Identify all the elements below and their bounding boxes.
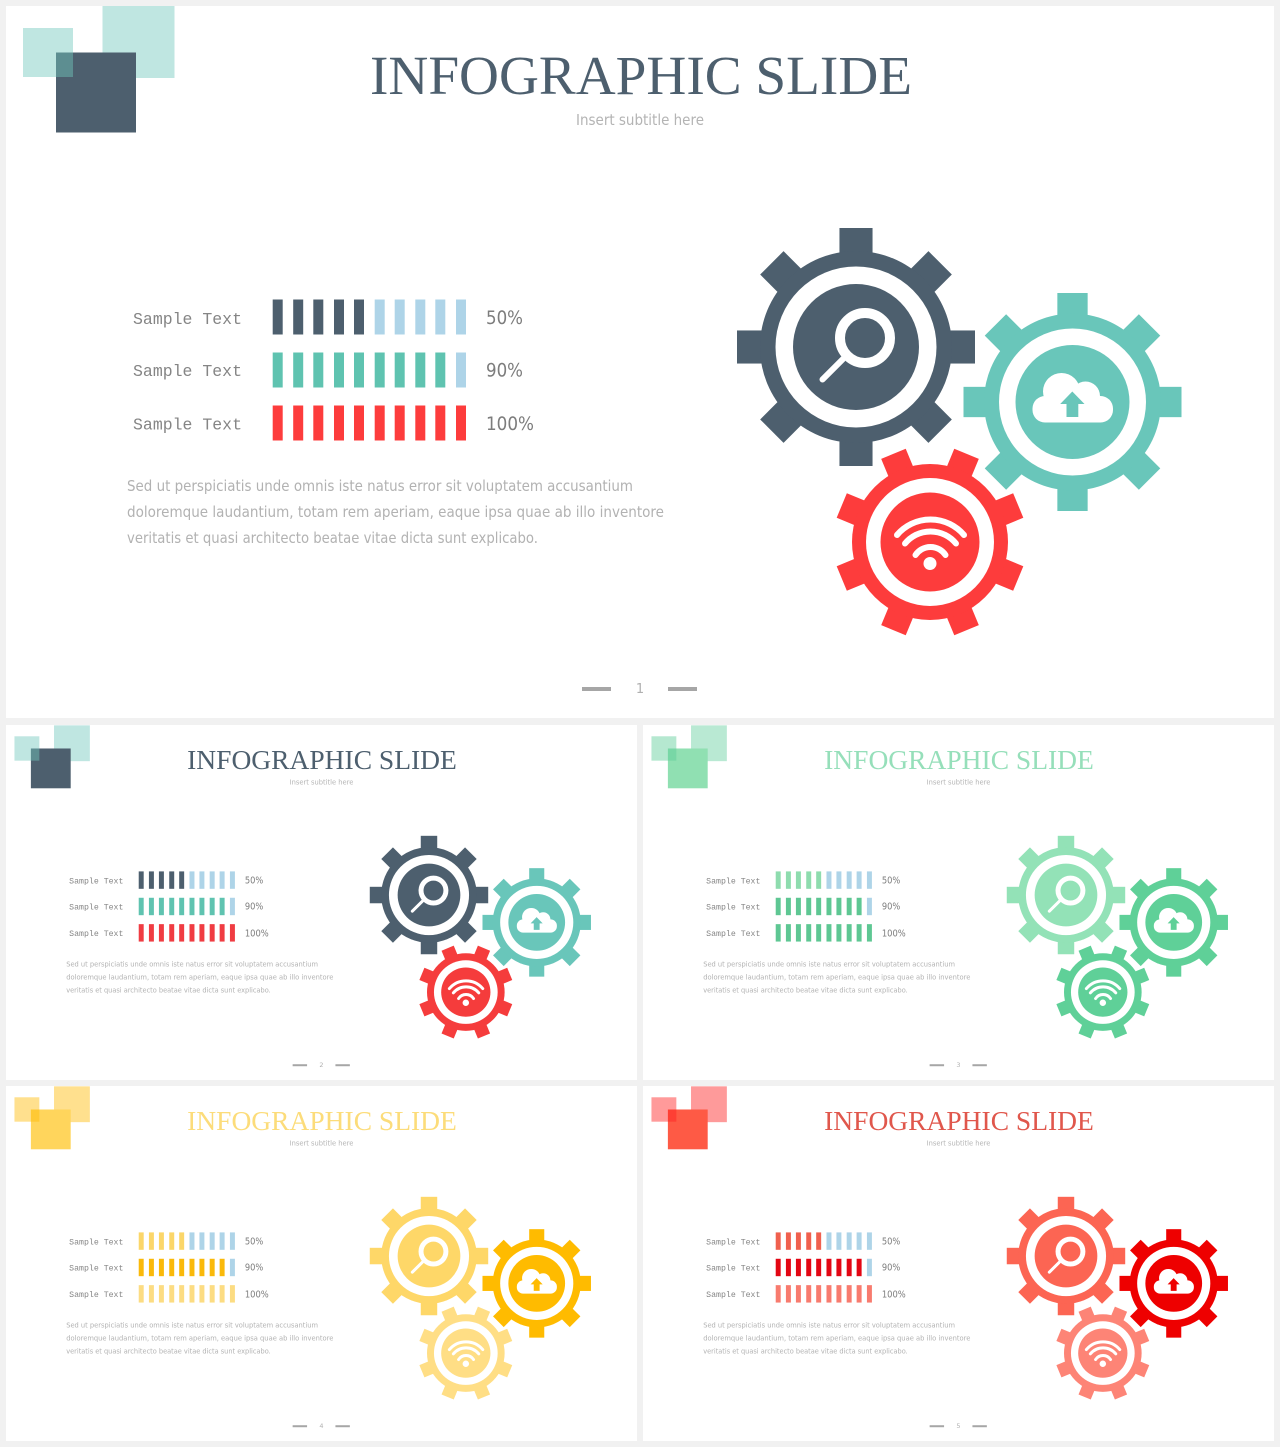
slide 3: green version bbox=[643, 725, 1274, 1080]
title: INFOGRAPHIC SLIDE bbox=[370, 45, 912, 106]
page number bbox=[293, 1061, 350, 1069]
bar row: 100%: Sample Text bbox=[706, 1290, 761, 1300]
body text: doloremque laudantium, totam rem aperiam, eaque ipsa quae ab illo inventore bbox=[127, 503, 664, 521]
icon: wifi gear bbox=[404, 1291, 528, 1415]
body text bbox=[703, 960, 971, 995]
bar row: 50%: 50% bbox=[882, 876, 900, 887]
subtitle: Insert subtitle here bbox=[576, 111, 704, 129]
bar row: 100% bbox=[133, 406, 534, 440]
bar row: 90%: 90% bbox=[486, 360, 523, 382]
bar row: 50% bbox=[69, 871, 263, 889]
page number bbox=[930, 1422, 987, 1430]
bar row: 100%: Sample Text bbox=[706, 929, 761, 939]
bar row: 90% bbox=[706, 1259, 900, 1276]
icon: cloud upload gear bbox=[964, 293, 1182, 511]
bar row: 50%: Sample Text bbox=[69, 877, 124, 887]
body text: Sed ut perspiciatis unde omnis iste natus error sit voluptatem accusantium bbox=[127, 477, 633, 495]
icon: wifi gear bbox=[404, 930, 528, 1054]
title: INFOGRAPHIC SLIDE bbox=[187, 1106, 457, 1136]
subtitle: Insert subtitle here bbox=[290, 1139, 354, 1148]
bar row: 90% bbox=[706, 898, 900, 915]
bar row: 100% bbox=[706, 1285, 906, 1303]
bar row: 50%: Sample Text bbox=[706, 877, 761, 887]
bar row: 90%: Sample Text bbox=[69, 902, 124, 912]
bar row: 50%: Sample Text bbox=[69, 1238, 124, 1248]
body text: veritatis et quasi architecto beatae vitae dicta sunt explicabo. bbox=[703, 1347, 908, 1356]
slide 1: main slate, teal and red version bbox=[6, 6, 1274, 718]
bar row: 50%: 50% bbox=[486, 307, 523, 329]
slide 2: slate, teal and red small version bbox=[6, 725, 637, 1080]
body text: veritatis et quasi architecto beatae vitae dicta sunt explicabo. bbox=[127, 529, 538, 547]
bar row: 100% bbox=[706, 924, 906, 942]
icon: wifi gear bbox=[805, 417, 1055, 667]
page number: 4 bbox=[319, 1422, 324, 1430]
bar row: 90%: 90% bbox=[245, 1263, 263, 1274]
body text: veritatis et quasi architecto beatae vitae dicta sunt explicabo. bbox=[66, 986, 271, 995]
page number bbox=[293, 1422, 350, 1430]
body text: Sed ut perspiciatis unde omnis iste natus error sit voluptatem accusantium bbox=[703, 960, 955, 969]
body text: Sed ut perspiciatis unde omnis iste natus error sit voluptatem accusantium bbox=[66, 1321, 318, 1330]
bar row: 90%: 90% bbox=[882, 902, 900, 913]
bar row: 100%: 100% bbox=[882, 928, 906, 939]
body text: veritatis et quasi architecto beatae vitae dicta sunt explicabo. bbox=[66, 1347, 271, 1356]
corner squares bbox=[14, 725, 90, 788]
body text bbox=[66, 1321, 334, 1356]
bar row: 90%: Sample Text bbox=[69, 1263, 124, 1273]
bar row: 90%: 90% bbox=[245, 902, 263, 913]
bar row: 100%: 100% bbox=[245, 1289, 269, 1300]
body text bbox=[703, 1321, 971, 1356]
icon: search gear bbox=[1007, 836, 1125, 954]
title: INFOGRAPHIC SLIDE bbox=[824, 1106, 1094, 1136]
bar row: 50%: 50% bbox=[245, 1237, 263, 1248]
bar row: 50% bbox=[706, 871, 900, 889]
page number: 2 bbox=[319, 1061, 324, 1069]
bar row: 90% bbox=[69, 1259, 263, 1276]
title: INFOGRAPHIC SLIDE bbox=[187, 745, 457, 775]
bar row: 100% bbox=[69, 1285, 269, 1303]
page number: 3 bbox=[956, 1061, 961, 1069]
bar row: 50% bbox=[706, 1232, 900, 1250]
page number bbox=[582, 682, 697, 697]
body text: veritatis et quasi architecto beatae vitae dicta sunt explicabo. bbox=[703, 986, 908, 995]
body text bbox=[127, 477, 664, 547]
bar row: 100%: Sample Text bbox=[69, 1290, 124, 1300]
bar row: 50%: Sample Text bbox=[133, 310, 242, 329]
corner squares bbox=[23, 6, 174, 132]
bar row: 90% bbox=[133, 352, 523, 388]
body text bbox=[66, 960, 334, 995]
icon: cloud upload gear bbox=[1119, 1229, 1228, 1338]
body text: Sed ut perspiciatis unde omnis iste natus error sit voluptatem accusantium bbox=[66, 960, 318, 969]
bar row: 90%: 90% bbox=[882, 1263, 900, 1274]
slide 4: yellow version bbox=[6, 1086, 637, 1441]
bar row: 90%: Sample Text bbox=[706, 902, 761, 912]
bar row: 90% bbox=[69, 898, 263, 915]
corner squares bbox=[651, 725, 727, 788]
bar row: 50%: 50% bbox=[245, 876, 263, 887]
icon: wifi gear bbox=[1041, 1291, 1165, 1415]
body text: doloremque laudantium, totam rem aperiam, eaque ipsa quae ab illo inventore bbox=[66, 973, 334, 982]
icon: search gear bbox=[737, 228, 975, 466]
bar row: 100%: 100% bbox=[245, 928, 269, 939]
subtitle: Insert subtitle here bbox=[927, 778, 991, 787]
bar row: 90%: Sample Text bbox=[706, 1263, 761, 1273]
icon: cloud upload gear bbox=[1119, 868, 1228, 977]
bar row: 100%: Sample Text bbox=[133, 416, 242, 434]
icon: search gear bbox=[370, 1197, 488, 1315]
subtitle: Insert subtitle here bbox=[290, 778, 354, 787]
bar row: 90%: Sample Text bbox=[133, 362, 242, 381]
body text: doloremque laudantium, totam rem aperiam, eaque ipsa quae ab illo inventore bbox=[66, 1334, 334, 1343]
title: INFOGRAPHIC SLIDE bbox=[824, 745, 1094, 775]
page number: 5 bbox=[956, 1422, 961, 1430]
icon: cloud upload gear bbox=[482, 1229, 591, 1338]
bar row: 50% bbox=[69, 1232, 263, 1250]
body text: Sed ut perspiciatis unde omnis iste natus error sit voluptatem accusantium bbox=[703, 1321, 955, 1330]
subtitle: Insert subtitle here bbox=[927, 1139, 991, 1148]
icon: wifi gear bbox=[1041, 930, 1165, 1054]
page number bbox=[930, 1061, 987, 1069]
corner squares bbox=[651, 1086, 727, 1149]
page number: 1 bbox=[636, 682, 644, 697]
bar row: 100%: 100% bbox=[486, 413, 534, 435]
bar row: 100%: Sample Text bbox=[69, 929, 124, 939]
bar row: 100%: 100% bbox=[882, 1289, 906, 1300]
body text: doloremque laudantium, totam rem aperiam, eaque ipsa quae ab illo inventore bbox=[703, 973, 971, 982]
icon: search gear bbox=[1007, 1197, 1125, 1315]
bar row: 100% bbox=[69, 924, 269, 942]
bar row: 50%: Sample Text bbox=[706, 1238, 761, 1248]
icon: cloud upload gear bbox=[482, 868, 591, 977]
body text: doloremque laudantium, totam rem aperiam, eaque ipsa quae ab illo inventore bbox=[703, 1334, 971, 1343]
bar row: 50% bbox=[133, 300, 523, 334]
slide 5: red version bbox=[643, 1086, 1274, 1441]
icon: search gear bbox=[370, 836, 488, 954]
corner squares bbox=[14, 1086, 90, 1149]
bar row: 50%: 50% bbox=[882, 1237, 900, 1248]
